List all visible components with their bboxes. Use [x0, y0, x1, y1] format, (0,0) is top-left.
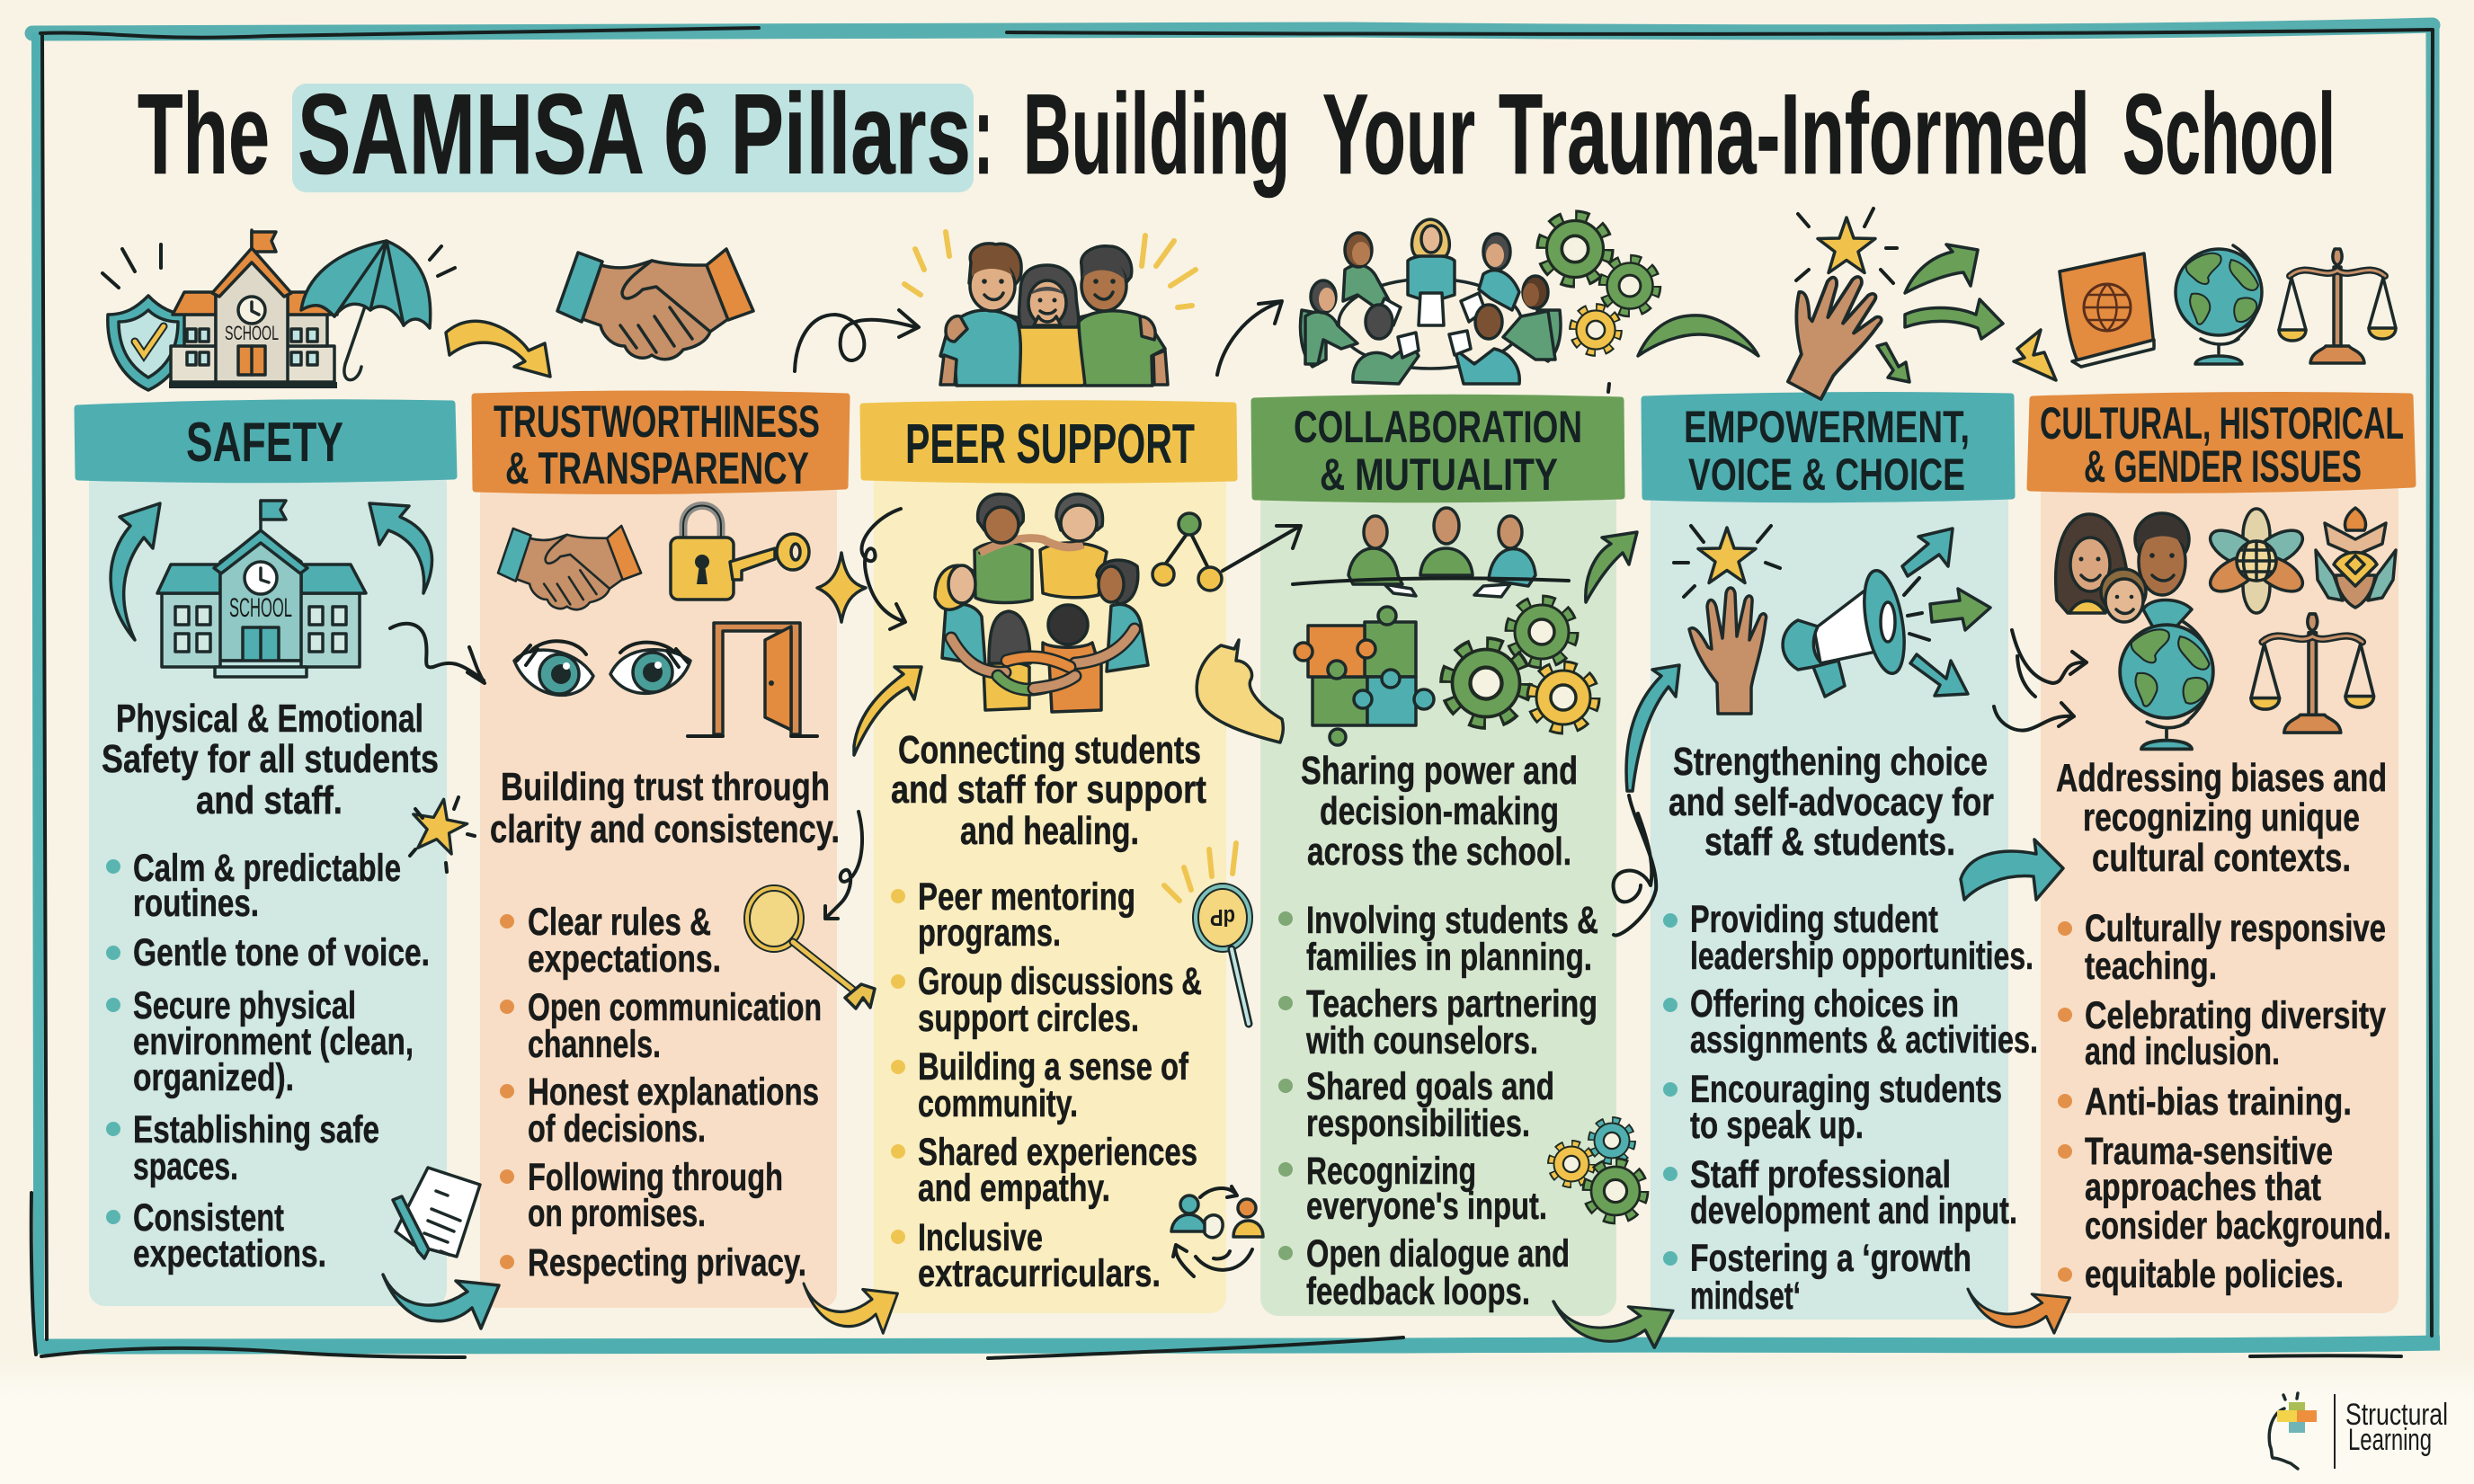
bullet list: trustworthiness: of decisions. — [528, 1107, 706, 1151]
bullet list: empowerment: assignments & activities. — [1690, 1018, 2038, 1062]
intro: empowerment: Strengthening choice — [1673, 740, 1988, 784]
icon: peer magnifier — [1164, 843, 1250, 1024]
icon: panel globe — [2120, 621, 2213, 749]
title: Your — [1322, 70, 1475, 198]
heading: peer support — [863, 404, 1234, 480]
sparks around safety icon — [102, 244, 455, 288]
bullet list: safety: Calm & predictable — [133, 847, 401, 890]
heading: collaboration — [1254, 397, 1622, 500]
icon: huddle — [935, 494, 1148, 712]
bullet list: peer support: and empathy. — [918, 1167, 1110, 1210]
intro: collaboration: decision-making — [1320, 789, 1559, 833]
arrows: megaphone — [1902, 529, 1990, 696]
icon: raised hand — [1759, 255, 1895, 407]
bullet list: empowerment: to speak up. — [1690, 1104, 1864, 1147]
panel: safety — [77, 403, 454, 1306]
icon: top scales — [2279, 249, 2396, 363]
intro: empowerment: staff & students. — [1704, 820, 1955, 864]
heading: collaboration: COLLABORATION — [1294, 402, 1582, 452]
intro: cultural: cultural contexts. — [2092, 836, 2351, 880]
arrow: squiggles to globe — [1994, 630, 2087, 731]
bullet list: safety: Gentle tone of voice. — [133, 931, 430, 974]
icon: shield — [108, 296, 189, 390]
panel: empowerment — [1644, 395, 2038, 1320]
arrow: teal swoop — [383, 1275, 499, 1328]
bullet list: peer support: Peer mentoring — [918, 875, 1135, 919]
arrow: teal ribbon — [1614, 665, 1679, 936]
intro: collaboration: Sharing power and — [1301, 749, 1578, 793]
arrow: orange swoop — [1968, 1289, 2070, 1333]
bullet list: cultural: Anti-bias training. — [2085, 1080, 2352, 1124]
icon: paper and pencil — [393, 1168, 480, 1258]
bullet list: safety: organized). — [133, 1056, 294, 1099]
icon: people cycle — [1171, 1186, 1263, 1276]
arrow: thin curl — [825, 812, 862, 919]
arrows: empowerment top — [1877, 244, 2003, 382]
bullet list: peer support: programs. — [918, 911, 1061, 955]
logo — [2269, 1393, 2448, 1469]
icon: molecule arrow — [1152, 513, 1301, 591]
arrow: yellow thin — [854, 667, 921, 755]
icon: panel scales — [2251, 614, 2373, 733]
bullet list: cultural: Culturally responsive — [2085, 907, 2386, 950]
logo: Learning — [2348, 1423, 2432, 1457]
heading: empowerment: EMPOWERMENT, — [1684, 402, 1970, 452]
heading: empowerment — [1644, 395, 2012, 500]
bullet list: safety: Consistent — [133, 1196, 284, 1240]
bullet list: safety: spaces. — [133, 1145, 238, 1188]
icon: small gears — [1553, 1122, 1642, 1218]
bullet list: peer support: support circles. — [918, 997, 1139, 1040]
arrow: squiggle to eyes — [390, 624, 485, 683]
icon: top globe — [2176, 245, 2262, 364]
icon: top gears — [1544, 218, 1655, 351]
arrows: panel school — [111, 503, 432, 640]
bullet list: trustworthiness: Clear rules & — [528, 901, 711, 944]
intro: safety: Physical & Emotional — [116, 697, 423, 741]
bullet list: empowerment: Offering choices in — [1690, 982, 1959, 1026]
icon: yellow swoosh — [1197, 640, 1283, 742]
bullet list: collaboration: Involving students & — [1306, 899, 1598, 942]
intro: peer support — [891, 728, 1206, 853]
heading: peer support: PEER SUPPORT — [905, 413, 1195, 475]
intro: peer support: Connecting students — [898, 728, 1201, 772]
heading: empowerment: VOICE & CHOICE — [1688, 449, 1965, 500]
bullet list: safety: routines. — [133, 882, 259, 925]
heading: trustworthiness: TRUSTWORTHINESS — [494, 396, 820, 447]
panel: cultural — [2030, 395, 2413, 1313]
bullet list: safety: Establishing safe — [133, 1108, 379, 1151]
panel: peer support — [863, 404, 1234, 1313]
title — [138, 70, 2336, 198]
icon: three friends — [904, 232, 1196, 386]
title: SAMHSA 6 Pillars — [298, 70, 971, 198]
bullet list: collaboration: Teachers partnering — [1306, 982, 1597, 1026]
bullet list: trustworthiness: on promises. — [528, 1192, 706, 1235]
heading: safety: SAFETY — [186, 412, 343, 474]
heading: cultural — [2030, 395, 2413, 492]
title: : — [974, 70, 993, 198]
bullet list: collaboration: Shared goals and — [1306, 1065, 1554, 1108]
arrow: safety to trust — [446, 321, 550, 377]
icon: megaphone — [1783, 567, 1929, 697]
bullet list: peer support: Inclusive — [918, 1216, 1043, 1259]
icon: door — [688, 623, 817, 736]
bullet list: collaboration: feedback loops. — [1306, 1270, 1530, 1313]
intro: trustworthiness: Building trust through — [501, 765, 830, 809]
bullet list: cultural: Trauma-sensitive — [2085, 1130, 2333, 1173]
bullet list: empowerment: leadership opportunities. — [1690, 935, 2033, 978]
bullet list: empowerment: Fostering a ‘growth — [1690, 1237, 1971, 1280]
arrow: curl into huddle — [861, 509, 905, 629]
icon: school: SCHOOL — [225, 322, 279, 344]
icon: panel handshake — [498, 526, 641, 609]
bullet list: empowerment: Staff professional — [1690, 1153, 1951, 1196]
arrow: green swoop — [1553, 1302, 1673, 1347]
bullet list: peer support: Group discussions & — [918, 960, 1202, 1003]
bullet list: trustworthiness: expectations. — [528, 937, 721, 981]
icon: school — [169, 230, 337, 388]
icon: sparkle — [817, 553, 866, 622]
icon: padlock and key — [671, 505, 809, 600]
icon: handshake — [557, 249, 753, 360]
intro: peer support: and staff for support — [891, 768, 1206, 812]
bullet list: trustworthiness — [500, 901, 822, 1284]
icon: puzzle — [1295, 607, 1434, 745]
arrow: green up — [1586, 532, 1637, 602]
bullet list: empowerment: Providing student — [1690, 898, 1938, 941]
icon: panel school — [157, 501, 366, 677]
icon: panel hand — [1689, 588, 1767, 714]
arrow: yellow swoop — [804, 1284, 897, 1333]
bullet list: trustworthiness: channels. — [528, 1023, 661, 1066]
icon: panel gears — [1449, 602, 1593, 727]
intro: collaboration: across the school. — [1307, 830, 1571, 874]
bullet list: cultural: and inclusion. — [2085, 1030, 2280, 1073]
icon: mandala — [2204, 509, 2309, 613]
bullet list: collaboration — [1278, 899, 1598, 1313]
bullet list: cultural: teaching. — [2085, 945, 2217, 988]
bullet list: collaboration: with counselors. — [1305, 1019, 1538, 1062]
bullet list: collaboration: Recognizing — [1306, 1150, 1476, 1193]
intro: trustworthiness — [490, 765, 840, 851]
heading: trustworthiness — [475, 394, 847, 493]
panel: trustworthiness — [475, 394, 847, 1308]
intro: empowerment: and self-advocacy for — [1669, 780, 1994, 824]
title: Building — [1023, 70, 1290, 198]
bullet list: collaboration: everyone's input. — [1306, 1185, 1547, 1228]
icon: small star — [408, 795, 475, 872]
icon: family — [2056, 513, 2192, 627]
title: Trauma-Informed — [1499, 70, 2090, 198]
bullet list: safety: expectations. — [133, 1232, 326, 1275]
bullet list: peer support — [891, 875, 1202, 1295]
intro: cultural: recognizing unique — [2083, 795, 2360, 840]
icon: peer magnifier: dP — [1210, 904, 1235, 931]
arrow: black to collaboration — [1217, 301, 1282, 375]
bullet list: empowerment: development and input. — [1690, 1189, 2017, 1232]
logo: Structural — [2345, 1398, 2448, 1432]
intro: peer support: and healing. — [960, 809, 1139, 853]
intro: trustworthiness: clarity and consistency. — [490, 807, 840, 851]
bullet list: collaboration: Open dialogue and — [1306, 1232, 1570, 1275]
arrow: teal big — [1961, 840, 2063, 900]
bullet list: cultural — [2058, 907, 2391, 1296]
icon: top star — [1796, 209, 1897, 283]
bullet list: cultural: Celebrating diversity — [2085, 994, 2386, 1037]
bullet list: trustworthiness: Honest explanations — [528, 1071, 819, 1114]
intro: cultural — [2056, 756, 2387, 880]
icon: book — [2060, 253, 2154, 367]
arrow: curly to peers — [795, 310, 919, 371]
icon: ornament — [2316, 508, 2396, 608]
arrow: green arch — [1638, 315, 1758, 356]
icon: team at table — [1293, 508, 1569, 597]
bullet list: safety: Secure physical — [133, 984, 356, 1027]
title: The — [138, 70, 270, 198]
panel: collaboration — [1254, 397, 1622, 1316]
bullet list: empowerment — [1663, 898, 2038, 1318]
bullet list: peer support: community. — [918, 1082, 1078, 1125]
intro: safety — [102, 697, 439, 822]
bullet list: trustworthiness: Respecting privacy. — [528, 1241, 806, 1284]
bullet list: collaboration: families in planning. — [1306, 936, 1592, 979]
icon: umbrella — [301, 241, 431, 380]
bullet list: safety: environment (clean, — [133, 1020, 414, 1063]
heading: trustworthiness: & TRANSPARENCY — [505, 443, 809, 493]
icon: gold magnifier key — [747, 888, 875, 1009]
heading: safety — [77, 403, 454, 480]
bullet list: empowerment: mindset‘ — [1690, 1275, 1801, 1318]
intro: collaboration — [1301, 749, 1578, 874]
bullet list: cultural: approaches that — [2085, 1166, 2321, 1209]
bullet list: trustworthiness: Following through — [528, 1156, 783, 1199]
icon: meeting table — [1300, 219, 1561, 384]
bullet list: empowerment: Encouraging students — [1690, 1068, 2002, 1111]
title highlight — [292, 84, 974, 192]
icon: eyes — [514, 641, 690, 695]
bullet list: collaboration: responsibilities. — [1306, 1102, 1530, 1145]
heading: collaboration: & MUTUALITY — [1320, 449, 1558, 500]
arrow: yellow lightning — [2014, 330, 2056, 380]
bullet list: peer support: extracurriculars. — [918, 1252, 1161, 1295]
bullet list: peer support: Shared experiences — [918, 1131, 1197, 1174]
intro: safety: Safety for all students — [102, 737, 439, 781]
bullet list: safety — [106, 847, 430, 1275]
intro: safety: and staff. — [196, 778, 343, 822]
bullet list: cultural: equitable policies. — [2085, 1253, 2344, 1296]
icon: panel star — [1674, 526, 1780, 597]
intro: empowerment — [1669, 740, 1994, 864]
bullet list: peer support: Building a sense of — [918, 1045, 1189, 1089]
bullet list: trustworthiness: Open communication — [528, 986, 822, 1029]
icon: panel school: SCHOOL — [229, 593, 292, 623]
